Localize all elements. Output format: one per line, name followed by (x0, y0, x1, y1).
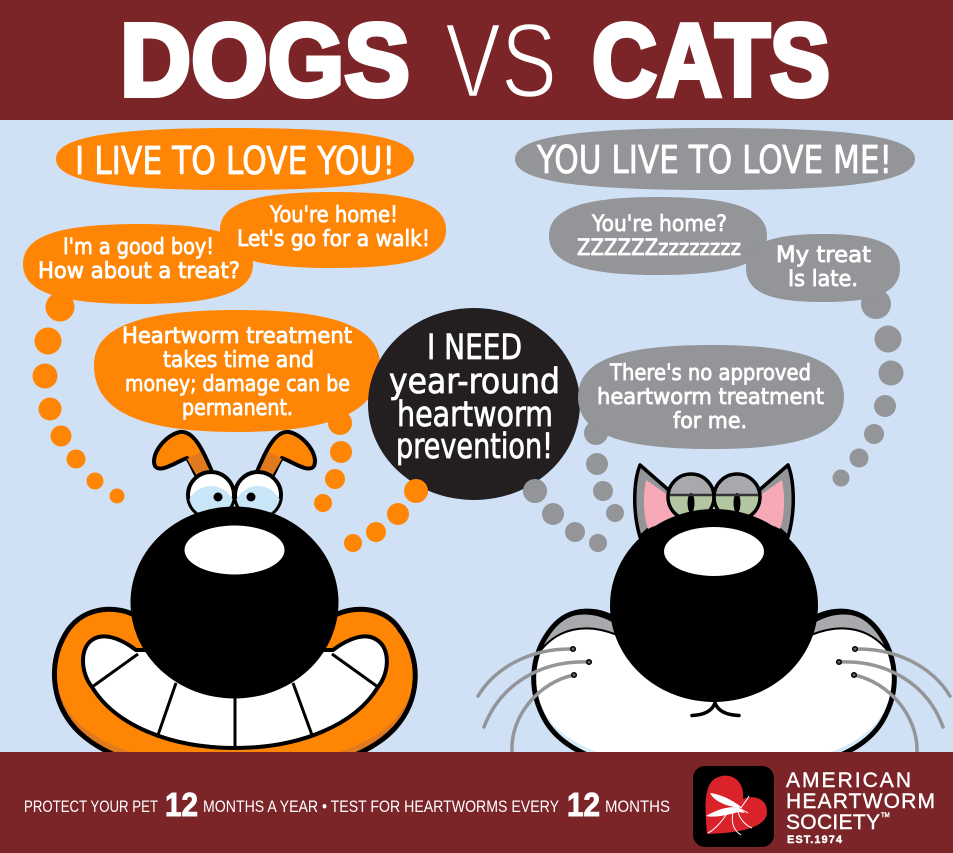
thought dots: dog right trail (314, 411, 352, 512)
bubble: heartworm treatment: money; damage can be (125, 372, 350, 397)
logo wordmark (786, 769, 935, 846)
bubble: heartworm treatment: Heartworm treatment (122, 324, 352, 349)
footer message: MONTHS (605, 797, 670, 816)
bubble: my treat is late (746, 234, 900, 302)
bubble: my treat is late: Is late. (788, 267, 858, 292)
dog nose highlight (184, 526, 284, 574)
bubble: no approved treatment: heartworm treatment (597, 385, 824, 410)
bubble: good boy (23, 224, 253, 304)
title: cats: CATS (592, 2, 830, 118)
cat whiskers (478, 647, 950, 752)
bubble: my treat is late: My treat (776, 243, 871, 268)
logo icon: heart and mosquito (693, 766, 774, 847)
bubble: heartworm treatment (94, 310, 380, 432)
thought dots: cat right trail (832, 289, 904, 486)
bubble: you're home, walk: Let's go for a walk! (237, 227, 430, 252)
dog character (54, 432, 415, 775)
footer banner (0, 752, 953, 853)
footer message: 12 (165, 786, 198, 823)
footer message: 12 (567, 786, 600, 823)
dog eyes (186, 470, 283, 514)
cat character (478, 465, 950, 775)
bubble: no approved treatment: for me. (673, 409, 747, 434)
dog mouth (52, 606, 418, 752)
cat mouth (692, 703, 739, 716)
cat head (610, 509, 818, 702)
bubble: I live to love you (56, 128, 414, 190)
dog teeth (83, 636, 387, 748)
title: vs: VS (445, 2, 557, 120)
bubble: I need prevention (368, 308, 580, 500)
bubble: I need prevention: heartworm (397, 395, 553, 435)
title banner (0, 0, 953, 120)
bubble: you're home, walk: You're home! (269, 203, 398, 228)
logo wordmark: EST.1974 (787, 834, 843, 846)
cat nose highlight (664, 527, 764, 576)
bubble: good boy: I'm a good boy! (63, 235, 214, 260)
bubble: heartworm treatment: permanent. (182, 396, 293, 421)
logo wordmark: TM (881, 813, 890, 819)
cat ears (635, 465, 793, 537)
bubble: I need prevention: I NEED (427, 328, 522, 368)
bubble: you're home, walk (220, 192, 446, 268)
bubble: no approved treatment: There's no approved (609, 361, 811, 386)
bubble: I need prevention: prevention! (396, 427, 553, 467)
bubble: I live to love you: I LIVE TO LOVE YOU! (75, 139, 395, 183)
thought dots: centre orange trail (344, 479, 428, 552)
logo wordmark: AMERICAN (786, 769, 911, 792)
bubble: you live to love me (515, 128, 915, 190)
bubble: no approved treatment (578, 345, 844, 449)
logo wordmark: SOCIETY (786, 811, 880, 834)
bubble: you're home zzz: ZZZZZZzzzzzzzz (577, 236, 741, 261)
title: dogs: DOGS (120, 2, 410, 118)
cat eyes (667, 472, 761, 520)
thought dots: cat left trail (523, 421, 624, 552)
footer message: PROTECT YOUR PET (24, 797, 158, 816)
bubble: good boy: How about a treat? (38, 259, 240, 284)
bubble: you're home zzz: You're home? (591, 212, 727, 237)
dog head (130, 506, 338, 698)
thought dots: dog left trail (32, 292, 124, 504)
thought dot: centre grey (523, 479, 547, 503)
dog ears (154, 432, 315, 477)
cat muzzle (531, 608, 897, 752)
bubble: you're home zzz (549, 197, 767, 275)
footer message: MONTHS A YEAR • TEST FOR HEARTWORMS EVERY (203, 797, 559, 816)
bubble: I need prevention: year-round (389, 362, 560, 402)
logo wordmark: HEARTWORM (786, 790, 935, 813)
bubble: heartworm treatment: takes time and (163, 348, 314, 373)
footer message (24, 786, 670, 823)
